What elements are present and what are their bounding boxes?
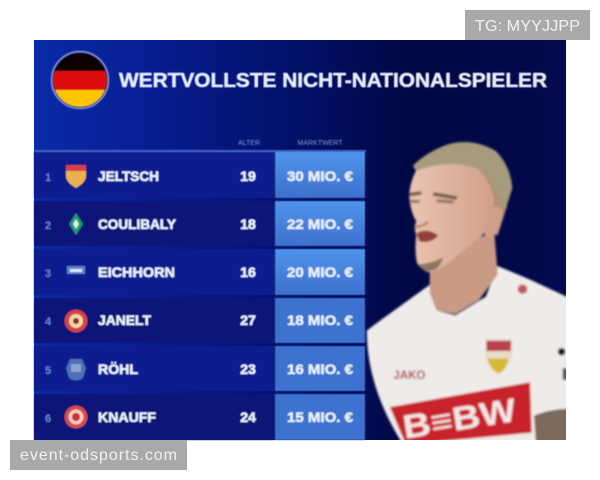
- sleeve sponsor: [558, 348, 565, 355]
- row 5: 23: [240, 361, 256, 377]
- hair: [413, 142, 512, 208]
- row 1: 30 MIO. €: [287, 169, 354, 184]
- row 4: JANELT: [98, 313, 152, 328]
- row 5: RÖHL: [98, 362, 138, 377]
- table: market value ranking: [34, 140, 366, 440]
- watermark: website: [10, 440, 187, 470]
- column header: age: ALTER: [238, 140, 260, 147]
- watermark: TG handle: TG: MYYJJPP: [475, 18, 580, 35]
- row 6: KNAUFF: [98, 410, 156, 425]
- mouth: [416, 231, 438, 242]
- row 3: EICHHORN: [98, 265, 175, 280]
- row 4: [34, 298, 365, 343]
- column header: market value: MARKTWERT: [298, 140, 343, 147]
- row 2: [34, 201, 365, 246]
- row 6: 24: [240, 409, 256, 425]
- row 2: COULIBALY: [98, 217, 176, 232]
- row 2: 22 MIO. €: [287, 217, 354, 232]
- row 5: 5: [45, 365, 51, 377]
- eyebrows and eyes: [409, 193, 457, 198]
- row 5: 16 MIO. €: [287, 362, 354, 377]
- neck: [430, 232, 498, 314]
- title: WERTVOLLSTE NICHT-NATIONALSPIELER: [119, 70, 548, 92]
- beard: [418, 258, 443, 271]
- row 5: [34, 346, 365, 391]
- icon: German flag: [50, 50, 110, 110]
- nose shadow: [414, 222, 428, 227]
- face: [409, 164, 494, 272]
- club crest: [485, 339, 512, 374]
- row 1: 19: [240, 168, 256, 184]
- row 1: [34, 152, 365, 198]
- player photo: [367, 142, 570, 447]
- jersey: [367, 266, 570, 446]
- row 2: 18: [240, 216, 256, 232]
- row 1: 1: [45, 172, 51, 184]
- watermark: TG handle: [465, 10, 590, 40]
- row 2: 2: [45, 220, 51, 232]
- tattooed arm: [532, 408, 566, 440]
- watermark: website: event-odsports.com: [20, 447, 177, 464]
- sponsor band: [390, 382, 532, 444]
- ear: [483, 207, 502, 237]
- row 6: [34, 394, 365, 440]
- head side, shaved: [472, 164, 507, 235]
- row 4: 27: [240, 312, 256, 328]
- sleeve trim: [518, 284, 527, 294]
- row 6: 6: [45, 413, 51, 425]
- player photo: B≡BW: [400, 392, 519, 447]
- row 6: 15 MIO. €: [287, 410, 354, 425]
- row 3: 16: [240, 264, 256, 280]
- kit maker logo: JAKO: [393, 370, 425, 382]
- row 3: 3: [45, 268, 51, 280]
- row 1: JELTSCH: [98, 169, 159, 184]
- row 4: 4: [45, 316, 52, 328]
- row 3: [34, 249, 365, 295]
- row 4: 18 MIO. €: [287, 313, 354, 328]
- panel: main blue background: [34, 40, 566, 440]
- row 3: 20 MIO. €: [287, 265, 354, 280]
